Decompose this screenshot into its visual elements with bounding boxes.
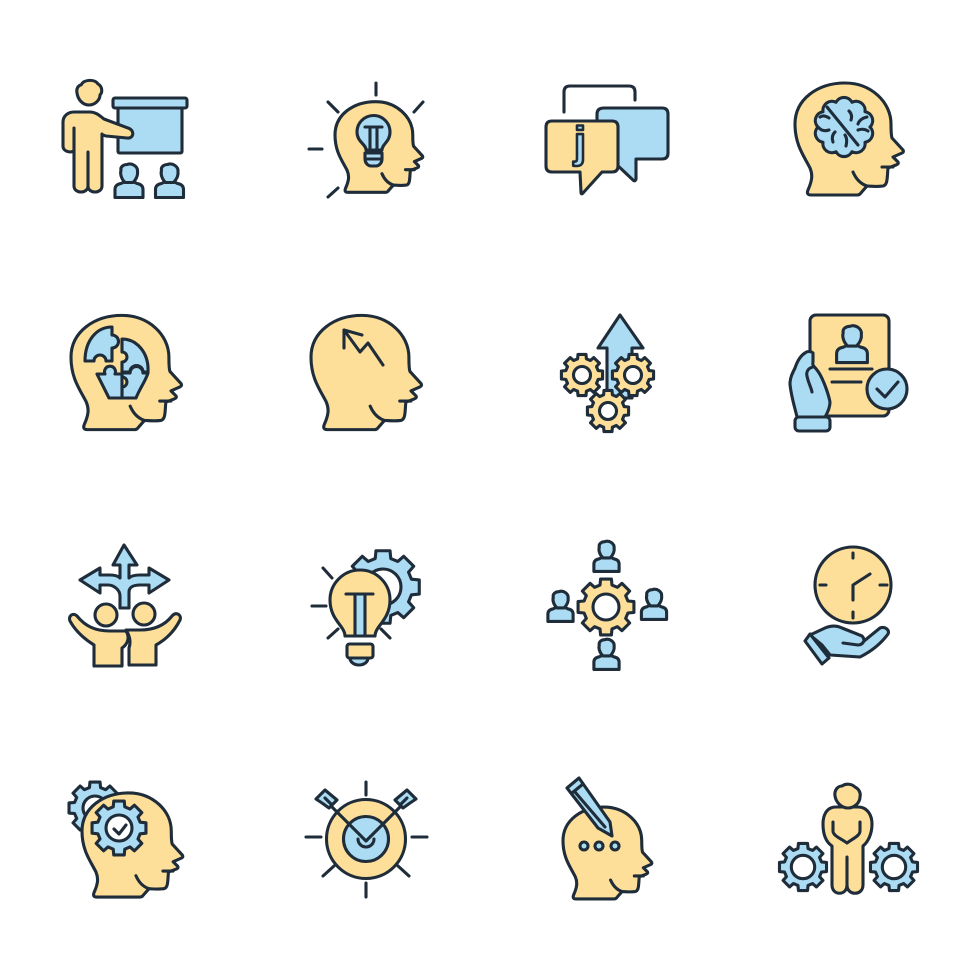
head <box>795 83 903 195</box>
head <box>563 807 652 899</box>
icon: head with gears and check <box>69 782 183 897</box>
right feather <box>395 790 416 808</box>
document <box>810 315 889 416</box>
icon: presenter at board with audience <box>63 80 187 198</box>
bulb base lower <box>350 656 368 665</box>
front gear <box>92 801 146 855</box>
check badge <box>867 369 907 409</box>
icon: bulb with gear <box>312 551 419 665</box>
icon: head with rising zigzag arrow <box>311 315 422 430</box>
bulb <box>330 570 390 636</box>
person head <box>835 784 860 808</box>
audience person right <box>156 164 184 198</box>
left person head <box>95 604 117 626</box>
gear bottom <box>587 390 629 432</box>
presenter body <box>63 112 133 192</box>
hand finger line <box>807 367 813 392</box>
icon: two people choosing direction <box>70 545 180 666</box>
gear right <box>612 354 654 396</box>
audience person left <box>115 164 143 198</box>
bullseye arc <box>358 839 374 847</box>
hand <box>790 352 830 417</box>
bulb <box>357 116 390 150</box>
brain <box>815 97 873 157</box>
puzzle top left <box>85 327 119 361</box>
presenter inner lines <box>74 128 88 186</box>
check mark <box>877 382 898 397</box>
text lines <box>830 369 872 382</box>
gear right <box>870 843 918 891</box>
icon: head with brain <box>795 83 903 195</box>
rays <box>306 782 427 897</box>
icon: info chat bubbles <box>546 86 668 194</box>
candidate <box>837 326 867 363</box>
clock face <box>815 547 891 623</box>
right person body <box>126 614 180 665</box>
icon: idea head with bulb <box>309 83 423 197</box>
puzzle bottom right <box>122 366 148 398</box>
head <box>71 315 182 430</box>
hand finger <box>843 641 864 645</box>
back outline bubble <box>564 86 635 112</box>
head <box>335 102 423 192</box>
check <box>114 825 126 834</box>
icon: head with pencil <box>563 778 652 899</box>
filament <box>346 594 373 636</box>
gear left <box>561 354 603 396</box>
person right <box>641 589 667 619</box>
icon: team around gear <box>548 541 667 669</box>
cuff <box>795 417 830 431</box>
person top <box>594 541 619 571</box>
gear <box>347 551 419 623</box>
back gear <box>69 782 121 834</box>
person body <box>823 807 872 893</box>
arrow shafts <box>330 805 402 841</box>
rays <box>312 568 390 638</box>
left person body <box>70 614 128 666</box>
icon: gears with up arrow <box>561 315 654 432</box>
pencil <box>567 778 612 836</box>
right person head <box>133 603 155 625</box>
icon: clock over hand <box>805 547 891 664</box>
icon: target with arrows <box>306 782 427 897</box>
icon: person between gears <box>779 784 918 893</box>
left feather <box>316 790 337 808</box>
direction arrows <box>80 545 169 608</box>
dots <box>580 842 619 850</box>
person bottom <box>594 639 619 669</box>
cuff <box>805 634 829 664</box>
head <box>311 315 422 430</box>
bulb base <box>347 644 373 658</box>
clock hands <box>853 574 870 600</box>
folded arms and legs <box>833 822 860 886</box>
zigzag arrow <box>344 330 383 365</box>
person left <box>548 591 573 621</box>
inner ring <box>344 816 388 862</box>
gear left <box>779 843 827 891</box>
icon: head with puzzle <box>71 315 182 430</box>
yellow bubble <box>546 121 618 194</box>
icon: resume held in hand <box>790 315 907 431</box>
head <box>82 793 183 897</box>
info letter: j <box>573 118 586 167</box>
bulb base <box>365 153 382 166</box>
rays <box>309 83 423 197</box>
hand palm <box>810 626 888 657</box>
puzzle top right <box>122 339 148 372</box>
up arrow <box>598 315 643 398</box>
board <box>113 98 187 153</box>
blue bubble <box>597 108 668 181</box>
puzzle bottom left <box>97 366 122 398</box>
presenter head <box>77 80 102 105</box>
outer ring <box>326 800 406 878</box>
gear <box>578 579 634 635</box>
clock ticks <box>820 553 887 618</box>
